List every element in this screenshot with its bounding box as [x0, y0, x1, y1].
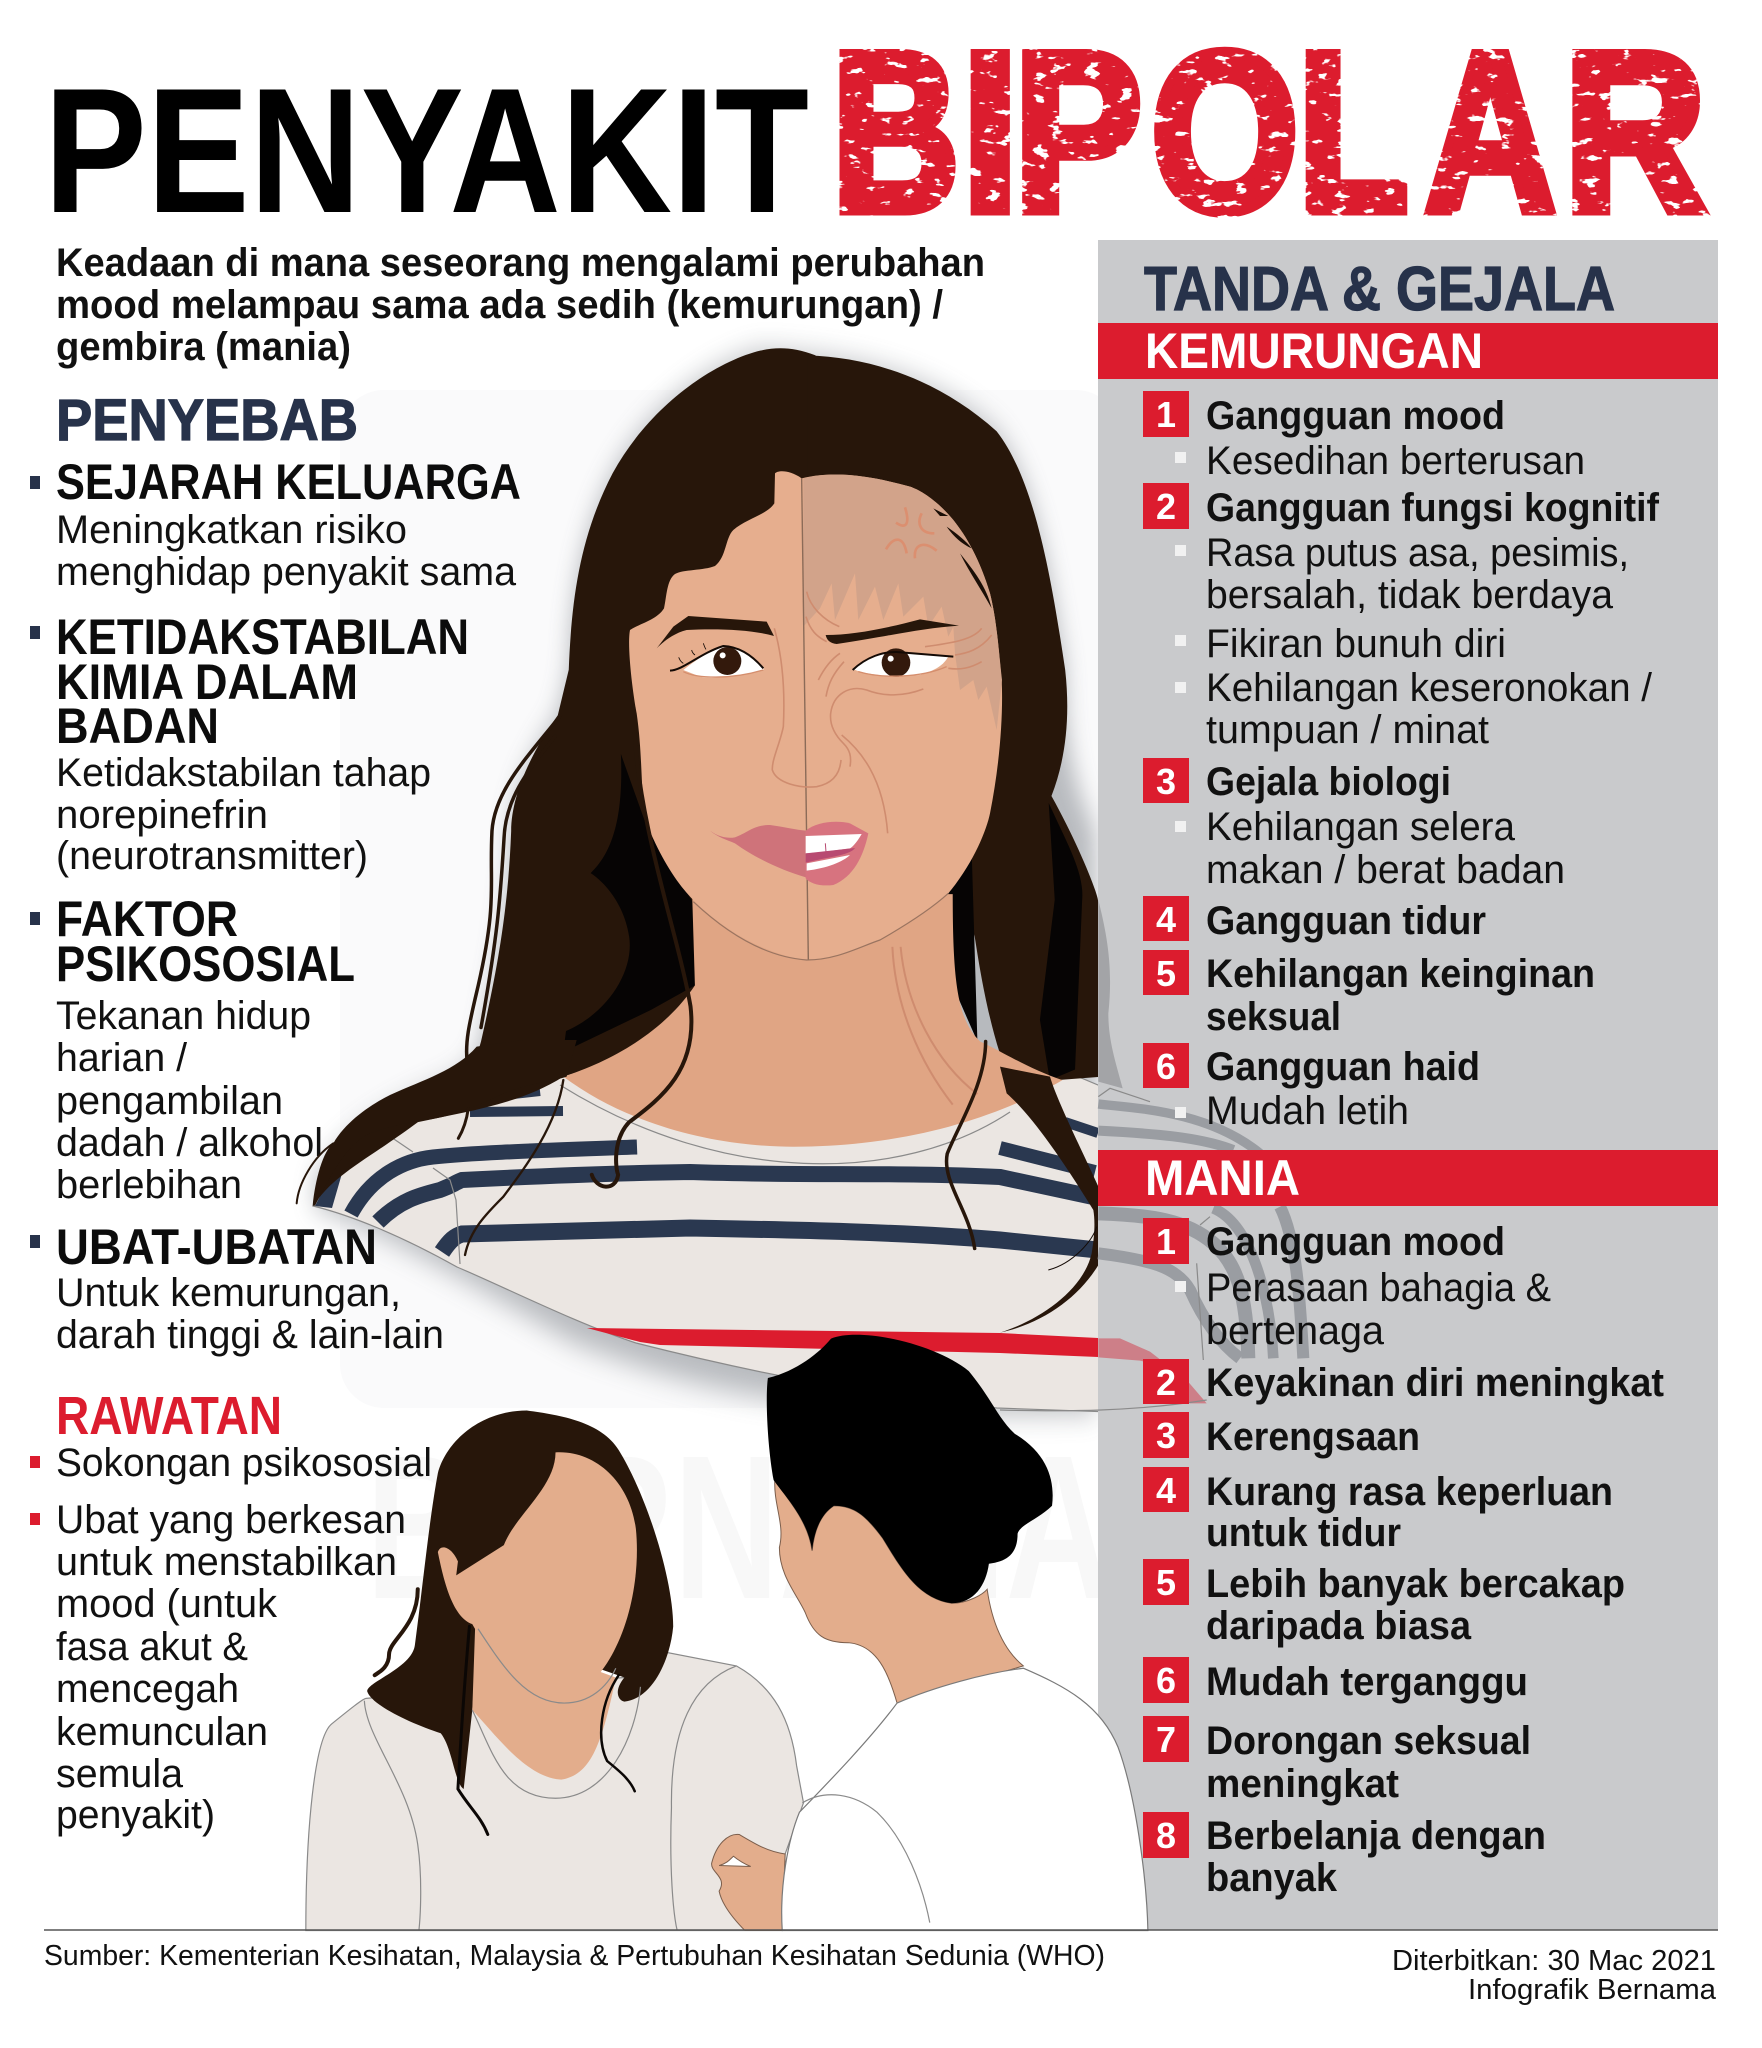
jaw line — [693, 893, 948, 960]
cause: faktor psikososial: Tekanan hidup — [56, 994, 311, 1038]
item 8: banyak — [1206, 1856, 1338, 1900]
credit: Infografik Bernama — [1468, 1974, 1717, 2006]
penyebab heading: PENYEBAB — [56, 388, 358, 453]
item 2: Rasa putus asa, pesimis, — [1206, 531, 1629, 575]
title word: bipolar distressed: R — [1564, 5, 1706, 258]
item 2: Kehilangan keseronokan / — [1206, 666, 1653, 710]
item 5: Kehilangan keinginan — [1206, 952, 1595, 996]
left woman jaw line — [478, 1629, 616, 1703]
mania heading: MANIA — [1145, 1150, 1300, 1206]
left eye — [670, 643, 764, 678]
kemurungan heading: KEMURUNGAN — [1145, 323, 1483, 379]
item 5: Lebih banyak bercakap — [1206, 1562, 1625, 1606]
publication date: Diterbitkan: 30 Mac 2021 — [1392, 1945, 1716, 1977]
left woman shirt seams — [364, 1666, 736, 1931]
shirt stripes — [351, 1091, 1098, 1252]
cause: faktor psikososial: pengambilan — [56, 1079, 283, 1123]
woman drop shadow — [313, 351, 1095, 1414]
item 1 — [1143, 1218, 1551, 1353]
treatment: ubat: Ubat yang berkesan — [56, 1498, 406, 1542]
anger mark — [886, 507, 937, 558]
cause: sejarah keluarga: Meningkatkan risiko — [56, 508, 407, 552]
item 6 — [1143, 1043, 1480, 1133]
treatment: ubat: semula — [56, 1752, 184, 1796]
cause: ketidakstabilan kimia: norepinefrin — [56, 793, 268, 837]
source: Sumber: Kementerian Kesihatan, Malaysia & Pertubuhan Kesihatan Sedunia (WHO) — [44, 1940, 1105, 1972]
ghost shirt outline — [1000, 1088, 1210, 1411]
rawatan section — [30, 1386, 432, 1837]
treatment: ubat: untuk menstabilkan — [56, 1540, 397, 1584]
item 2: 2 — [1156, 1362, 1176, 1403]
item 5 — [1143, 950, 1595, 1039]
item 2: bersalah, tidak berdaya — [1206, 573, 1614, 617]
cause: ketidakstabilan kimia: BADAN — [56, 698, 219, 754]
ghost of illustration through panel — [1000, 900, 1303, 1411]
right woman hand — [712, 1834, 785, 1931]
left woman face — [438, 1452, 637, 1703]
item 6: Gangguan haid — [1206, 1045, 1480, 1089]
item 7: 7 — [1156, 1719, 1176, 1760]
cause: faktor psikososial: harian / — [56, 1036, 188, 1080]
title word: bipolar distressed: I — [962, 5, 1019, 258]
mania banner — [1098, 1150, 1718, 1206]
face base — [629, 471, 1002, 960]
title word: penyakit: PENYAKIT — [44, 51, 809, 250]
treatment: ubat: kemunculan — [56, 1710, 268, 1754]
item 3: 3 — [1156, 761, 1176, 802]
left woman hair — [367, 1411, 673, 1789]
item 5: seksual — [1206, 995, 1341, 1039]
cause: ketidakstabilan kimia: KETIDAKSTABILAN — [56, 609, 469, 665]
hair left — [313, 348, 816, 1206]
cause: faktor psikososial: PSIKOSOSIAL — [56, 936, 355, 992]
item 6: Mudah letih — [1206, 1089, 1409, 1133]
item 6: 6 — [1156, 1046, 1176, 1087]
right face wrinkled forehead — [803, 475, 1002, 730]
item 7 — [1143, 1716, 1531, 1806]
nose and wrinkles — [772, 592, 992, 833]
item 2: Gangguan fungsi kognitif — [1206, 486, 1660, 530]
item 8: Berbelanja dengan — [1206, 1814, 1546, 1858]
right woman blouse — [782, 1668, 1148, 1931]
left woman shirt — [306, 1652, 803, 1931]
intro text: mood melampau sama ada sedih (kemurungan) / — [56, 283, 943, 327]
long right hair strand — [1000, 1067, 1099, 1333]
footer — [44, 1930, 1718, 2006]
item 4: 4 — [1156, 899, 1176, 940]
panel: tanda & gejala — [1098, 240, 1718, 1930]
cause: faktor psikososial — [30, 891, 355, 1207]
cause: ketidakstabilan kimia — [30, 609, 469, 878]
watermark text: BERNAMA — [366, 1413, 1111, 1642]
section: kemurungan — [1098, 323, 1718, 1133]
right eye — [853, 648, 953, 677]
neck wrinkles — [892, 947, 977, 1105]
ghost red stripe — [1098, 1338, 1207, 1403]
illustration: woman portrait — [297, 348, 1123, 1412]
treatment: ubat: mencegah — [56, 1667, 239, 1711]
item 8 — [1143, 1812, 1546, 1900]
title word: bipolar distressed: B — [832, 6, 959, 258]
penyebab section — [30, 388, 521, 1357]
item 1: Perasaan bahagia & — [1206, 1266, 1551, 1310]
treatment: ubat: fasa akut & — [56, 1625, 248, 1669]
item 5: 5 — [1156, 953, 1176, 994]
cause: sejarah keluarga: menghidap penyakit sama — [56, 550, 517, 594]
cause: ubat-ubatan — [30, 1219, 444, 1357]
item 3: Gejala biologi — [1206, 760, 1451, 804]
kemurungan banner — [1098, 323, 1718, 379]
item 1: Gangguan mood — [1206, 1220, 1505, 1264]
title word: bipolar distressed: O — [1151, 6, 1299, 259]
item 7: meningkat — [1206, 1762, 1399, 1806]
rawatan heading: RAWATAN — [56, 1386, 282, 1446]
ghost stripes — [1098, 1104, 1303, 1358]
section: mania — [1098, 1150, 1718, 1900]
cause: faktor psikososial: FAKTOR — [56, 891, 238, 947]
left eyebrow — [657, 616, 774, 648]
right woman sleeve line — [802, 1795, 930, 1923]
cause: ubat-ubatan: Untuk kemurungan, — [56, 1271, 401, 1315]
lower hair strands — [297, 1080, 563, 1255]
item 6: 6 — [1156, 1660, 1176, 1701]
footer rule — [44, 1929, 1718, 1931]
item 2 — [1143, 483, 1660, 752]
cause: faktor psikososial: dadah / alkohol — [56, 1121, 323, 1165]
title word: bipolar distressed: L — [1298, 7, 1408, 259]
shirt seams — [385, 1085, 1010, 1264]
item 1 — [1143, 391, 1585, 483]
cause: ketidakstabilan kimia: (neurotransmitter) — [56, 834, 368, 878]
loose hair strands — [467, 715, 986, 1248]
intro text — [56, 241, 985, 369]
item 2: Fikiran bunuh diri — [1206, 622, 1506, 666]
item 6: Mudah terganggu — [1206, 1660, 1528, 1704]
title word: bipolar distressed: A — [1425, 7, 1556, 259]
hair right — [816, 356, 1098, 1080]
treatment: ubat: mood (untuk — [56, 1582, 278, 1626]
hair shadow patches — [563, 754, 1082, 1080]
left hair sweep — [313, 1040, 577, 1206]
treatment: sokongan: Sokongan psikososial — [56, 1441, 432, 1485]
item 4 — [1143, 1467, 1613, 1555]
cause: sejarah keluarga — [30, 454, 521, 594]
treatment: ubat: penyakit) — [56, 1793, 215, 1837]
striped shirt — [313, 1070, 1110, 1412]
item 4: Kurang rasa keperluan — [1206, 1470, 1613, 1514]
item 2: Keyakinan diri meningkat — [1206, 1361, 1664, 1405]
ghost hair — [1098, 900, 1123, 1088]
item 1: 1 — [1156, 394, 1176, 435]
lips — [710, 822, 868, 885]
item 4: 4 — [1156, 1470, 1176, 1511]
item 2: tumpuan / minat — [1206, 708, 1489, 752]
item 5: 5 — [1156, 1562, 1176, 1603]
item 8: 8 — [1156, 1815, 1176, 1856]
item 1: Gangguan mood — [1206, 394, 1505, 438]
illustration: two women talking — [306, 1335, 1148, 1931]
item 3: Kehilangan selera — [1206, 805, 1516, 849]
item 5: daripada biasa — [1206, 1604, 1472, 1648]
face centre line — [802, 478, 808, 960]
cause: ketidakstabilan kimia: Ketidakstabilan tahap — [56, 751, 431, 795]
title word: bipolar distressed: P — [1014, 6, 1142, 258]
cause: ubat-ubatan: darah tinggi & lain-lain — [56, 1313, 444, 1357]
cause: ketidakstabilan kimia: KIMIA DALAM — [56, 654, 358, 710]
item 5 — [1143, 1559, 1625, 1648]
treatment: ubat — [30, 1498, 406, 1837]
title: penyakit bipolar — [44, 5, 1706, 259]
left woman collar — [472, 1687, 640, 1798]
forehead hair wisps — [933, 508, 992, 608]
right woman hair — [767, 1335, 1053, 1603]
neck — [563, 894, 1062, 1147]
left shoulder stripe — [315, 1176, 342, 1208]
item 1: 1 — [1156, 1221, 1176, 1262]
cause: sejarah keluarga: SEJARAH KELUARGA — [56, 454, 521, 510]
item 3: makan / berat badan — [1206, 848, 1565, 892]
cause: faktor psikososial: berlebihan — [56, 1163, 242, 1207]
face — [629, 471, 1002, 960]
item 3: 3 — [1156, 1415, 1176, 1456]
panel heading: TANDA & GEJALA — [1144, 255, 1615, 324]
red shirt stripe — [587, 1328, 1098, 1357]
item 1: bertenaga — [1206, 1309, 1385, 1353]
item 2: 2 — [1156, 486, 1176, 527]
intro text: gembira (mania) — [56, 325, 351, 369]
thin strand — [1048, 1227, 1097, 1270]
hair masses — [313, 348, 1123, 1206]
intro text: Keadaan di mana seseorang mengalami perubahan — [56, 241, 985, 285]
watermark panel — [340, 390, 1120, 1408]
item 3 — [1143, 1412, 1420, 1459]
item 3: Kerengsaan — [1206, 1415, 1420, 1459]
right woman neck and face — [775, 1480, 1023, 1703]
item 3 — [1143, 758, 1565, 892]
right eyebrow — [826, 619, 959, 644]
title word: bipolar distressed — [832, 5, 1706, 259]
item 1: Kesedihan berterusan — [1206, 439, 1585, 483]
item 7: Dorongan seksual — [1206, 1719, 1531, 1763]
item 4: untuk tidur — [1206, 1511, 1401, 1555]
cause: ubat-ubatan: UBAT-UBATAN — [56, 1219, 377, 1275]
left woman neck — [472, 1626, 616, 1780]
left woman loose strands — [375, 1589, 635, 1834]
item 4: Gangguan tidur — [1206, 899, 1486, 943]
